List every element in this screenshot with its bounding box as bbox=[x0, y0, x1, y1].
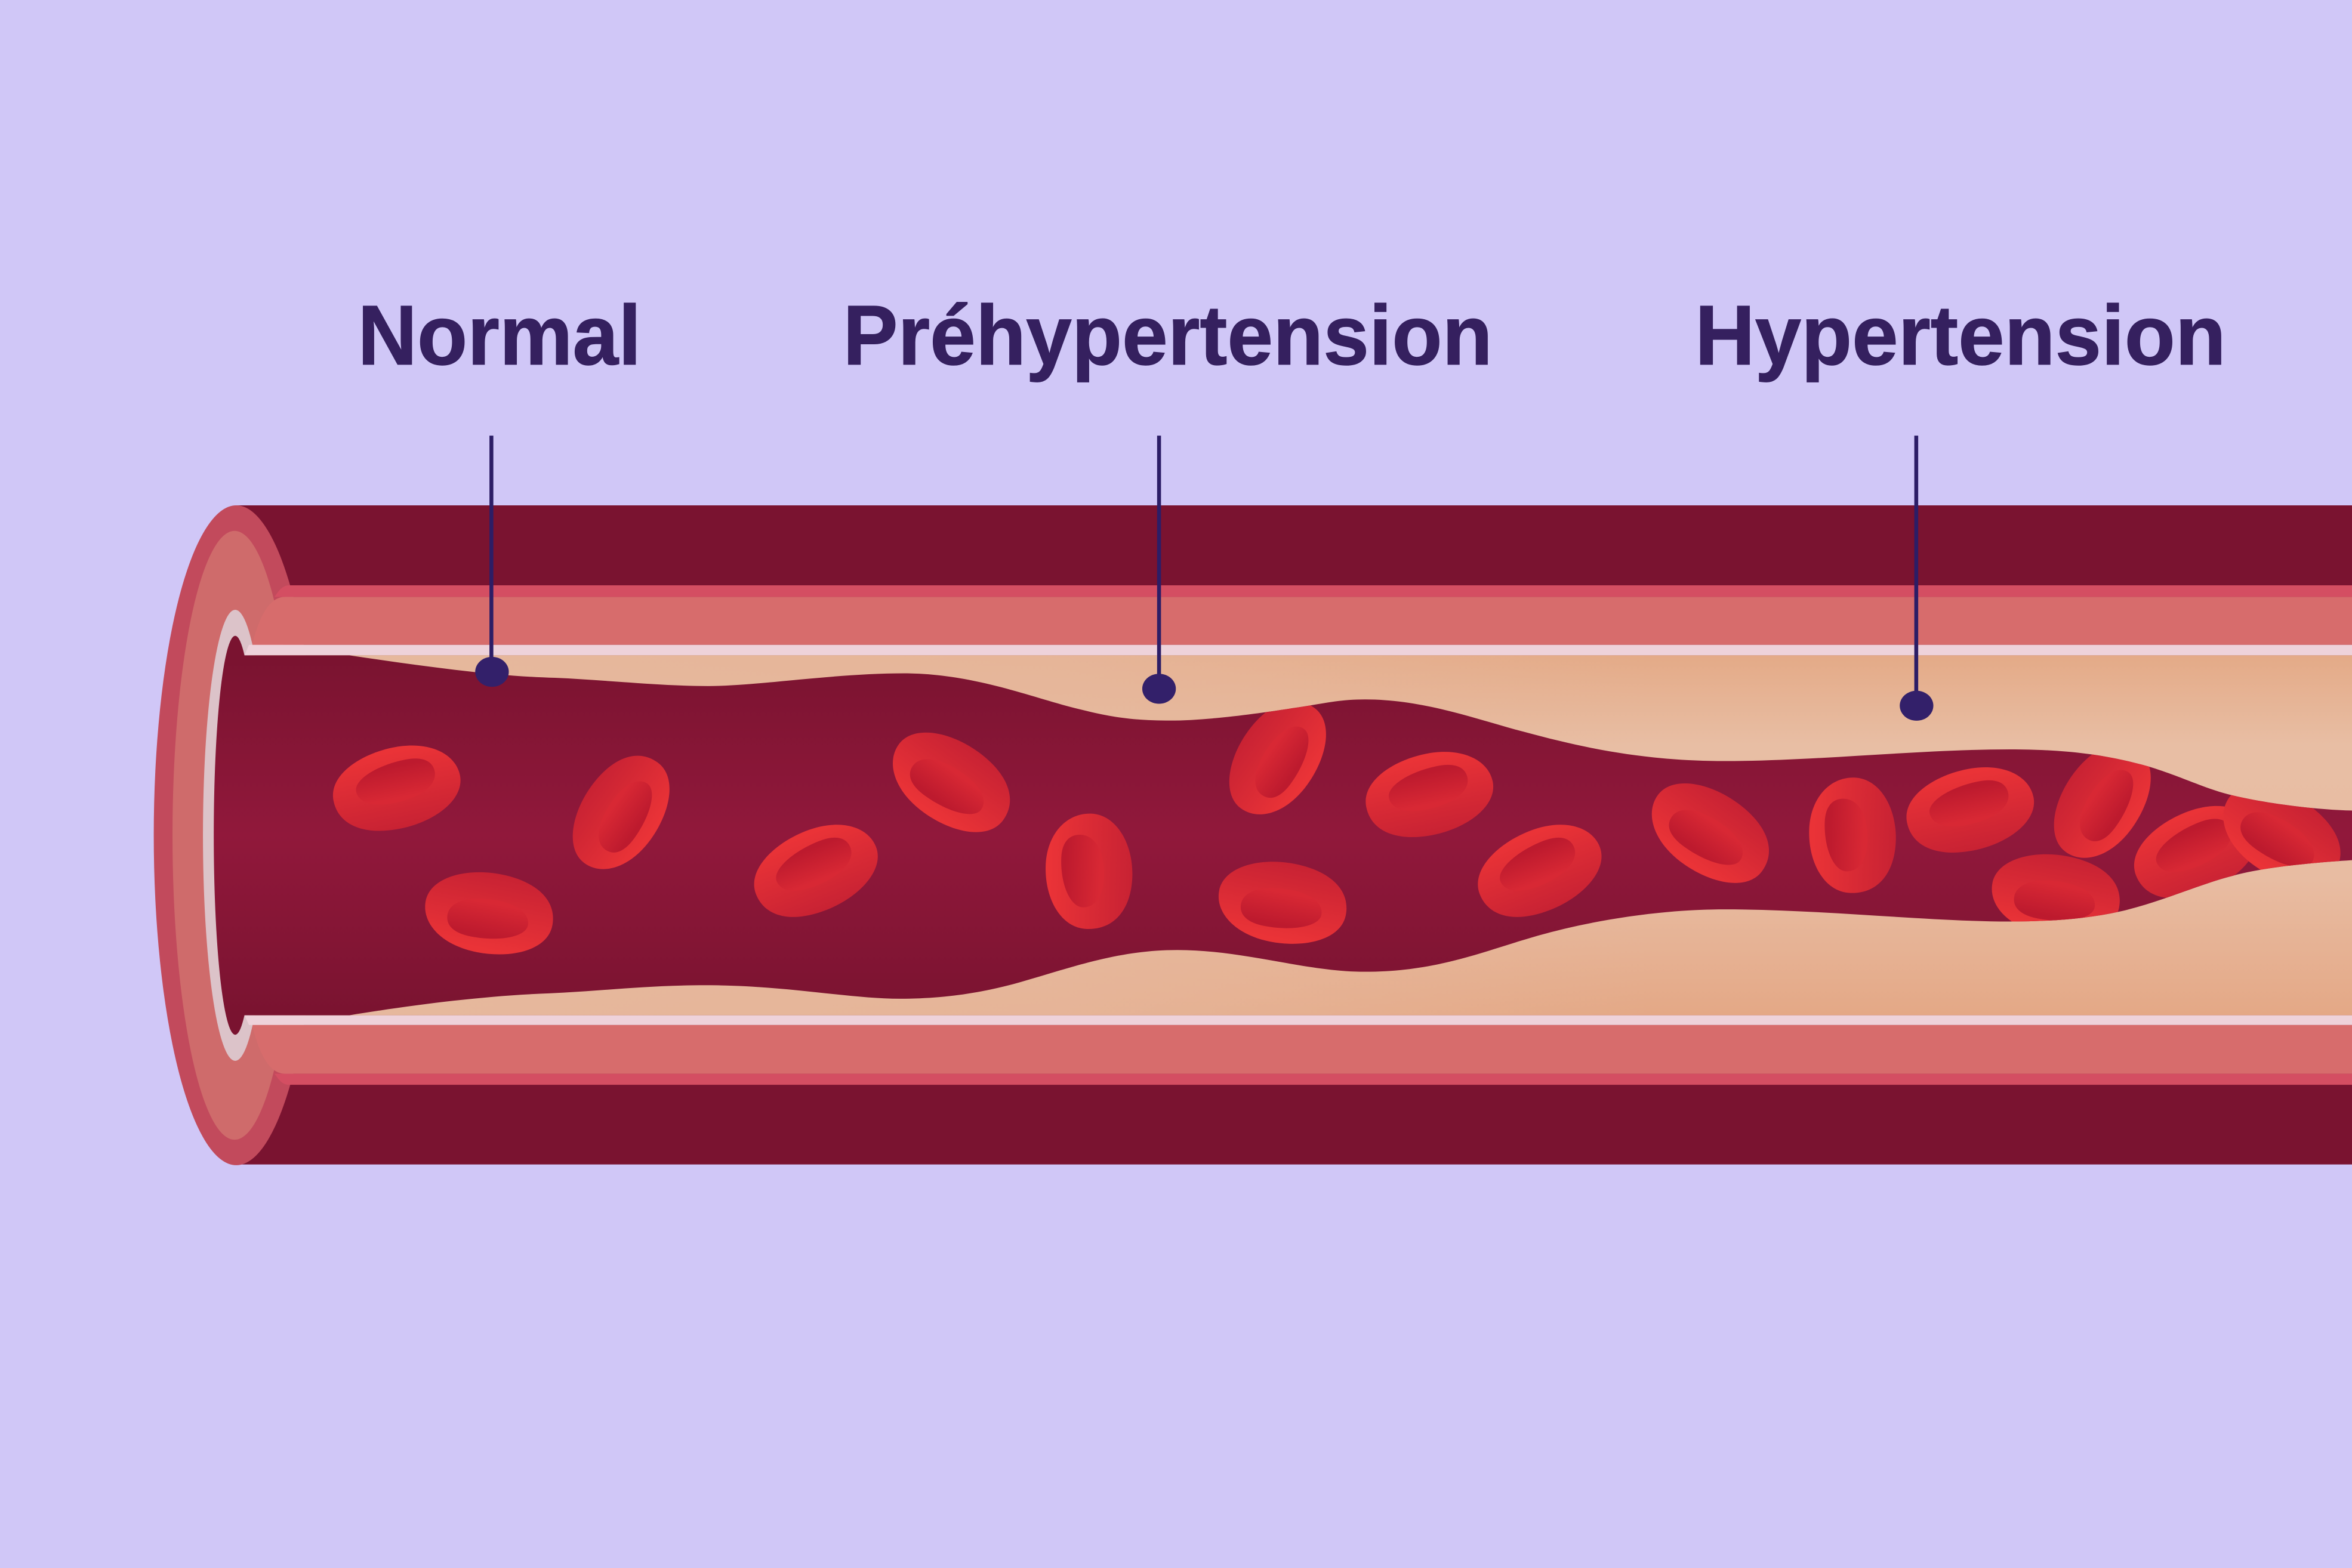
pointer line: Hypertension bbox=[1915, 436, 1918, 701]
artery opening: outer ring bbox=[154, 505, 319, 1165]
red blood cell 11 bbox=[1652, 783, 1769, 883]
upper wall layers bbox=[252, 585, 2352, 645]
pointer dot: Préhypertension bbox=[1142, 674, 1176, 704]
red blood cell 6 bbox=[1044, 812, 1135, 930]
red blood cell 1 bbox=[333, 746, 461, 831]
artery opening: hole bbox=[214, 636, 257, 1035]
red blood cell 13 bbox=[1906, 767, 2034, 853]
pointer dot: Normal bbox=[475, 657, 509, 687]
callout: Préhypertension bbox=[843, 288, 1493, 704]
pointer line: Normal bbox=[489, 436, 494, 668]
red blood cell 17 bbox=[2206, 765, 2352, 906]
upper inner lining bbox=[245, 645, 2352, 655]
red blood cell 8 bbox=[1365, 752, 1493, 837]
blood channel narrowing bbox=[236, 655, 2352, 1016]
artery opening: middle ring bbox=[172, 531, 297, 1140]
pointer line: Préhypertension bbox=[1157, 436, 1161, 684]
red blood cell 15 bbox=[1985, 843, 2127, 947]
heading: Hypertension: Hypertension bbox=[1695, 288, 2226, 383]
lower wall layers bbox=[252, 1025, 2352, 1085]
artery illustration bbox=[154, 505, 2352, 1165]
heading: Normal: Normal bbox=[357, 288, 641, 383]
red blood cell 2 bbox=[425, 872, 553, 955]
lower inner lining bbox=[245, 1016, 2352, 1025]
pointer dot: Hypertension bbox=[1900, 691, 1934, 721]
red blood cells bbox=[333, 705, 2341, 955]
red blood cell 5 bbox=[893, 733, 1010, 832]
callout: Hypertension bbox=[1695, 288, 2226, 721]
callout: Normal bbox=[357, 288, 641, 687]
red blood cell 14 bbox=[2054, 754, 2151, 858]
heading: Préhypertension: Préhypertension bbox=[843, 288, 1493, 383]
red blood cell 7 bbox=[1229, 705, 1326, 814]
artery outer wall bbox=[236, 505, 2352, 1165]
plaque build-up bbox=[249, 655, 2352, 1016]
red blood cell 9 bbox=[1478, 825, 1602, 917]
red blood cell 16 bbox=[2121, 791, 2271, 913]
red blood cell 12 bbox=[1807, 776, 1898, 894]
red blood cell 3 bbox=[573, 755, 670, 869]
artery opening: inner light ring bbox=[203, 610, 267, 1061]
red blood cell 10 bbox=[1219, 862, 1346, 944]
red blood cell 4 bbox=[754, 825, 878, 917]
